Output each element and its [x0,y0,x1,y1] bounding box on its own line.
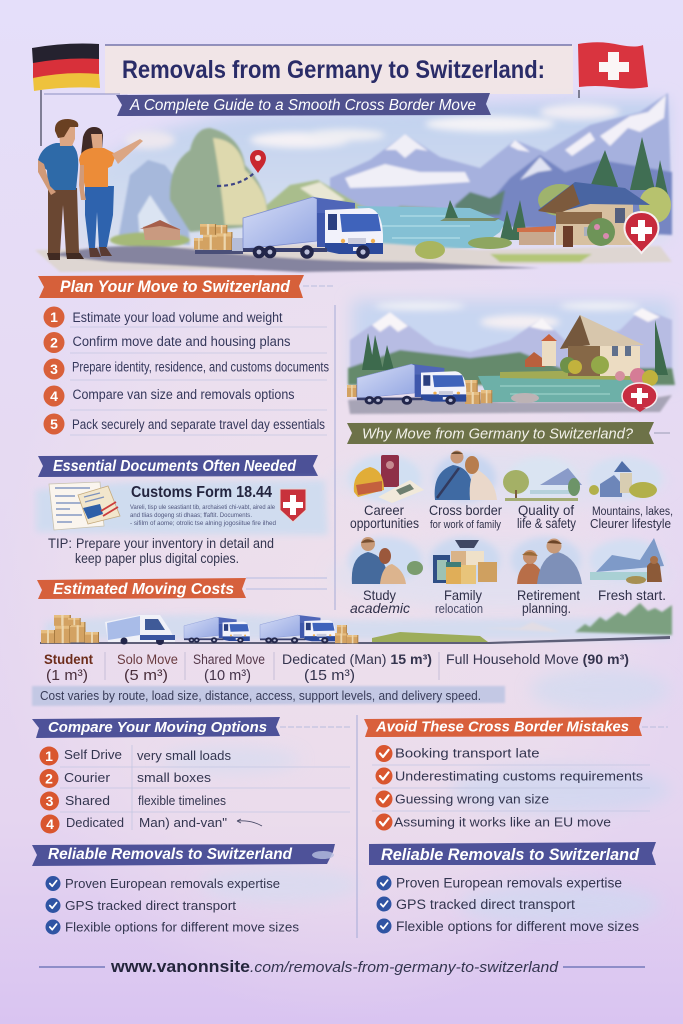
panel: why move [347,422,673,616]
panel: plan your move [38,275,335,435]
step list: Confirm move date and housing plans [72,334,291,349]
icon: retirement couple [511,537,582,584]
truck: medium [184,617,250,643]
truck [357,364,466,405]
move size labels: (5 m³) [124,667,168,684]
illustration: lake and chalet scene [347,300,675,414]
icon: swiss shield [280,489,306,522]
people: man and woman pointing [38,119,143,260]
options table: small boxes [137,770,212,785]
hero illustration: alpine landscape [35,93,672,272]
mistakes list: Underestimating customs requirements [395,768,644,784]
truck: large [260,615,336,643]
panel: compare moving options [32,717,350,834]
labels: row 1: opportunities [350,516,419,531]
step list: 4 [50,388,58,404]
woman [79,127,143,257]
labels: row 2 [350,587,666,616]
swiss location pin [624,212,658,253]
options table: 2 [45,770,53,786]
left rocky mountain [118,160,190,245]
tip text: keep paper plus digital copies. [75,551,239,566]
step list [44,306,329,435]
options table: 3 [46,793,54,809]
options table: 4 [46,816,54,832]
lake [357,206,505,250]
move size labels [44,651,629,684]
labels: row 2: academic [350,600,410,616]
subtitle ribbon [116,93,491,116]
options table [40,745,350,834]
footer url: www.vanonnsite [110,958,250,976]
flag: Germany [32,44,100,146]
benefits list left: Proven European removals expertise [65,876,280,891]
heading ribbon: compare [32,717,350,738]
step list: Prepare identity, residence, and customs documents [72,360,329,374]
labels: row 2: Family [444,587,482,603]
far mountains [330,93,672,215]
bottom column divider [356,715,358,938]
labels: row 1 [350,502,673,531]
distant forest [455,190,505,215]
pine forest and cottage [415,137,671,259]
form fine print: and tlias dogeng sti dhaas; ffaftit. Documents. [130,513,252,519]
step list: 5 [50,416,58,432]
benefits list right: GPS tracked direct transport [396,897,575,912]
form fine print [130,505,276,527]
column divider [334,305,336,610]
labels: row 1: Cleurer lifestyle [590,517,671,531]
panel: avoid mistakes [364,717,668,830]
benefits list left: Flexible options for different move sizes [65,920,300,934]
options table: Dedicated [66,815,124,830]
subtitle ribbon: A Complete Guide to a Smooth Cross Border Move [129,97,476,114]
chalet [562,315,644,349]
tip text: TIP: [48,536,72,551]
benefits list right: Flexible options for different move sizes [396,919,639,934]
boxes stack [41,615,99,643]
heading ribbon: documents: Essential Documents Often Needed [53,458,296,475]
panel: estimated moving costs [32,578,672,706]
options table: flexible timelines [138,793,226,808]
step list: Estimate your load volume and weight [72,310,283,325]
bushes [110,232,190,248]
icon: quality of life [503,457,582,501]
icon: fresh start [590,538,664,584]
heading ribbon: reliable left: Reliable Removals to Switzerland [48,846,293,863]
panel: essential documents [36,455,328,566]
vehicle strip scenery [40,603,672,644]
big tree-like hill [170,128,268,232]
man [38,119,84,260]
labels: row 2: Study [363,587,396,603]
boxes [347,380,492,404]
heading ribbon: reliable right: Reliable Removals to Switzerland [381,846,640,864]
boxes on pallet [194,224,244,254]
tip text: Prepare your inventory in detail and [76,536,274,551]
heading ribbon: costs: Estimated Moving Costs [53,581,234,598]
benefits list right [376,876,639,934]
river [478,370,640,402]
move size labels: Full Household Move (90 m³) [446,651,629,667]
footer url: .com/removals-from-germany-to-switzerland [250,959,559,976]
heading ribbon: compare: Compare Your Moving Options [48,719,267,736]
form title: Customs Form 18.44 [131,484,272,501]
map pin with dashed route [217,150,266,186]
heading ribbon: plan: Plan Your Move to Switzerland [60,278,291,296]
options table: Self Drive [64,747,122,762]
options table: 1 [45,748,53,764]
move size labels: (10 m³) [204,667,251,684]
watercolor panel [36,480,328,535]
mistakes list: Booking transport late [395,746,540,760]
swiss badge [622,383,657,412]
icon: family relocation boxes [430,537,500,584]
options table: Courier [64,770,111,785]
labels: row 1: Quality of [518,502,574,518]
mistakes list [372,745,650,830]
flag: Switzerland [578,42,648,98]
benefits list left: GPS tracked direct transport [65,898,236,913]
labels: row 2: planning. [522,600,571,616]
moving truck [243,197,383,259]
van [105,615,175,645]
options table: Shared [65,793,110,808]
heading ribbon: avoid: Avoid These Cross Border Mistakes [375,718,629,736]
form fine print: - sifilm of aome; otrolic tse alning jogosiitue fire ilhed [130,521,276,527]
move size labels: Dedicated (Man) 15 m³) [282,651,432,667]
heading ribbon: why move: Why Move from Germany to Switzerland? [362,426,634,442]
chalet [556,200,633,245]
mistakes list: Guessing wrong van size [395,792,549,806]
mistakes list: Assuming it works like an EU move [394,814,611,830]
title band [44,45,573,94]
labels: row 1: for work of family [430,519,501,531]
heading ribbon: costs [37,578,327,599]
labels: row 2: Fresh start. [598,587,666,603]
step list: 3 [50,361,58,377]
tip text [48,536,274,566]
icon: cross border couple [434,450,497,502]
labels: row 2: relocation [435,602,483,616]
move size labels: (15 m³) [304,667,355,684]
move size labels: Shared Move [193,652,265,667]
benefits list right: Proven European removals expertise [396,876,622,890]
labels: row 2: Retirement [517,587,580,603]
heading ribbon: why move [347,422,670,444]
options table: very small loads [137,748,231,763]
road [35,243,672,272]
green hills [255,180,470,240]
panel: reliable removals left [32,844,335,934]
form fine print: Vareli, tisp ule seastiant tib, archaiseti chi-vabt, aired ale [130,505,276,511]
step list: Compare van size and removals options [72,387,295,402]
footer url [39,958,645,976]
boxes small [335,625,358,643]
step list: 2 [50,334,58,350]
labels: row 1: Career [364,502,404,518]
step list: 1 [50,309,58,325]
heading ribbon: reliable left [32,844,335,866]
benefits list left [46,876,300,934]
icon: study [348,537,423,584]
labels: row 1: Mountains, lakes, [592,506,673,518]
heading ribbon: plan [38,275,335,298]
move size labels: (1 m³) [46,667,88,684]
labels: row 1: life & safety [517,516,576,531]
title: Removals from Germany to Switzerland: [122,56,545,84]
options table: Man) and-van" [139,815,227,830]
labels: row 1: Cross border [429,502,502,518]
move size labels: Solo Move [117,652,178,667]
icon: document papers [49,482,120,530]
panel: reliable removals right [369,842,656,934]
icon: mountains and lakes [588,457,662,499]
step list: Pack securely and separate travel day essentials [72,417,325,432]
move size labels: Student [44,652,93,667]
small cottage [140,220,181,240]
icon: career [349,455,424,503]
cost note band: Cost varies by route, load size, distance, access, support levels, and delivery speed. [40,688,481,703]
